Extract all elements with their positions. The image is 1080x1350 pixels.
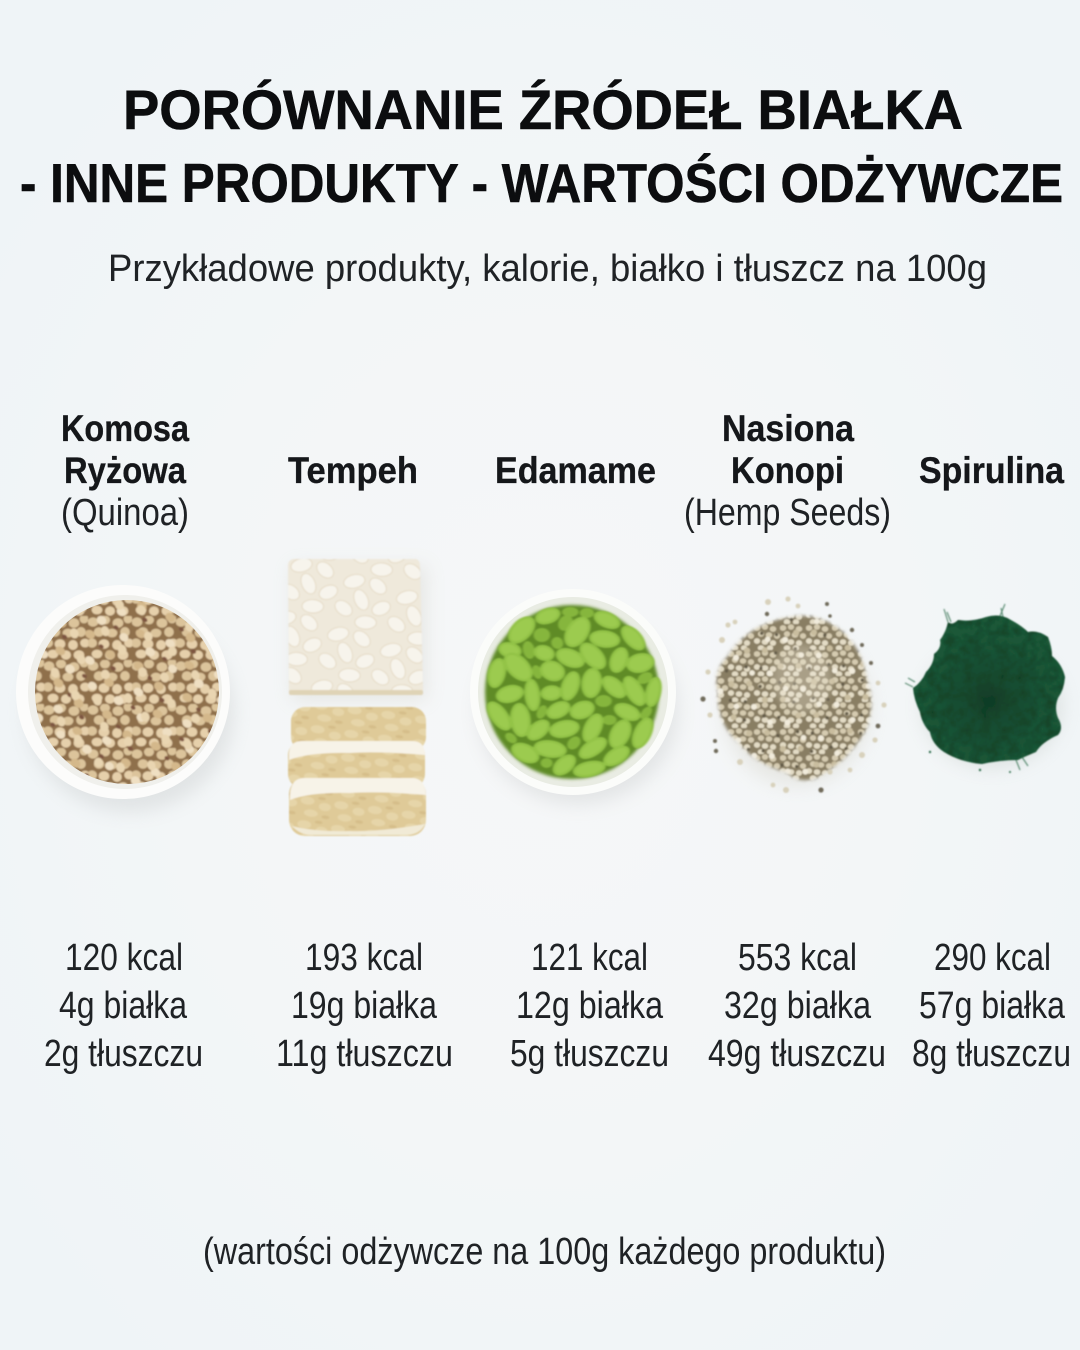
nutrition values: quinoa: 2g tłuszczu	[44, 1033, 203, 1075]
nutrition values: tempeh: 193 kcal	[305, 937, 423, 979]
nutrition values: edamame	[510, 937, 669, 1075]
nutrition values: hemp seeds: 32g białka	[724, 985, 872, 1027]
column heading: hemp seeds	[684, 408, 891, 534]
title: PORÓWNANIE ŹRÓDEŁ BIAŁKA	[123, 78, 963, 141]
column heading: tempeh: Tempeh	[288, 450, 418, 491]
subtitle: Przykładowe produkty, kalorie, białko i tłuszcz na 100g	[108, 248, 987, 290]
column heading: quinoa: Komosa	[61, 408, 189, 449]
column heading: hemp seeds: (Hemp Seeds)	[684, 492, 891, 534]
nutrition values: quinoa	[44, 937, 203, 1075]
nutrition values: hemp seeds: 49g tłuszczu	[708, 1033, 886, 1075]
nutrition values: quinoa: 120 kcal	[65, 937, 183, 979]
image: tempeh block and slices	[288, 559, 426, 836]
footnote: (wartości odżywcze na 100g każdego produktu)	[203, 1231, 886, 1273]
nutrition values: quinoa: 4g białka	[59, 985, 188, 1027]
nutrition values: edamame: 12g białka	[516, 985, 664, 1027]
column heading: quinoa: (Quinoa)	[61, 492, 189, 534]
nutrition values: hemp seeds	[708, 937, 886, 1075]
column heading: hemp seeds: Nasiona	[722, 408, 854, 449]
nutrition values: edamame: 5g tłuszczu	[510, 1033, 669, 1075]
column heading: quinoa	[61, 408, 189, 534]
nutrition values: spirulina: 290 kcal	[934, 937, 1051, 979]
image: bowl of edamame	[470, 589, 678, 804]
image: pile of hemp seeds	[700, 596, 890, 795]
image: bowl of quinoa	[16, 585, 234, 812]
nutrition values: tempeh: 19g białka	[291, 985, 438, 1027]
image: pile of spirulina powder	[905, 604, 1065, 773]
tempeh block	[288, 559, 423, 695]
column heading: edamame: Edamame	[495, 450, 656, 491]
nutrition values: hemp seeds: 553 kcal	[738, 937, 857, 979]
nutrition values: edamame: 121 kcal	[531, 937, 648, 979]
scattered seeds	[705, 596, 887, 793]
column heading: spirulina: Spirulina	[919, 450, 1064, 491]
column heading: hemp seeds: Konopi	[731, 450, 844, 491]
nutrition values: tempeh: 11g tłuszczu	[276, 1033, 453, 1075]
nutrition values: spirulina	[912, 937, 1071, 1075]
tempeh slices	[288, 707, 426, 836]
nutrition values: tempeh	[276, 937, 453, 1075]
column heading: quinoa: Ryżowa	[64, 450, 186, 491]
title	[20, 78, 1063, 214]
